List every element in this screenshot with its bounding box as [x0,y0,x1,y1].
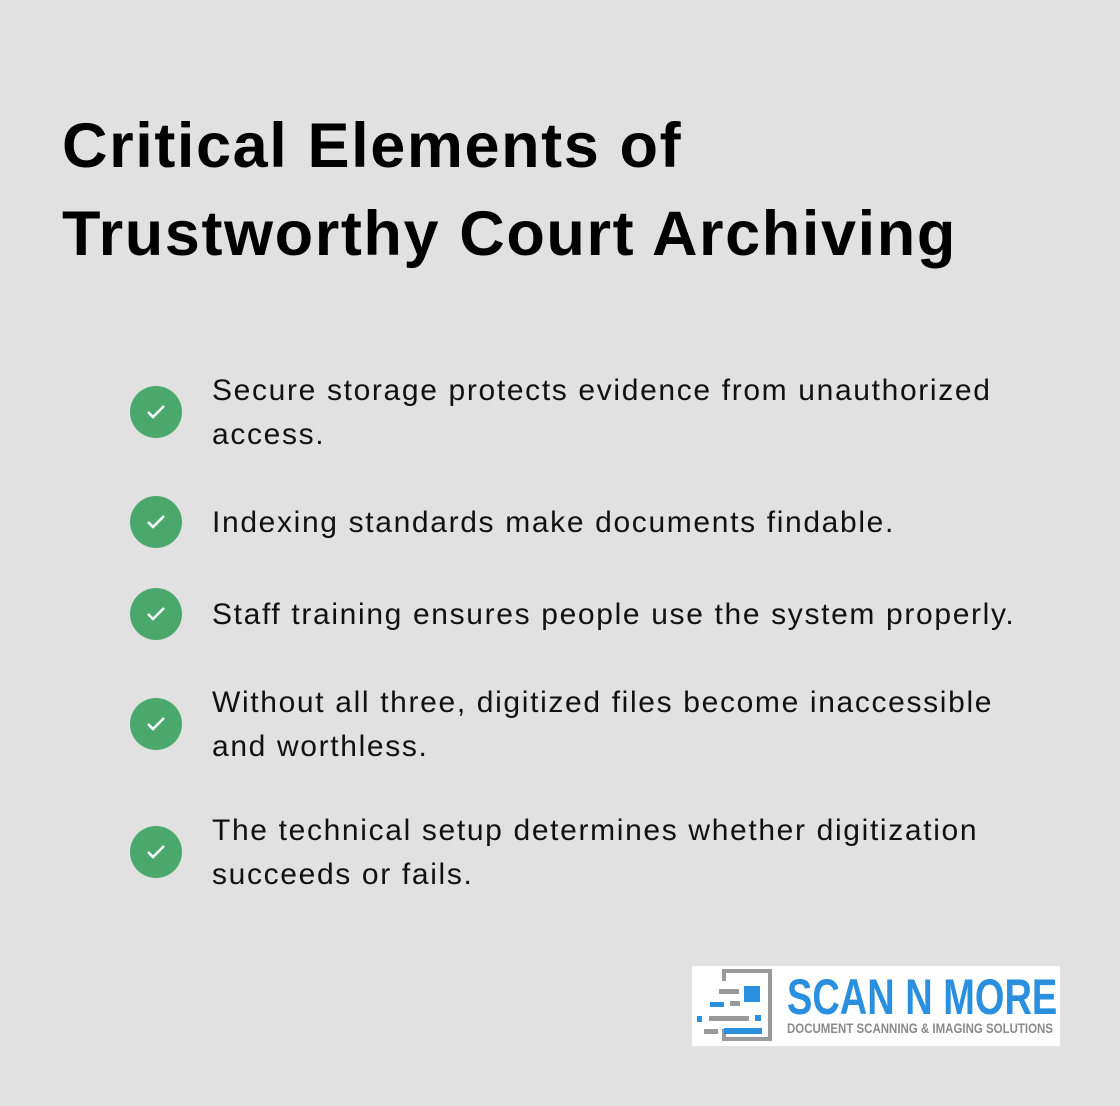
text: succeeds or fails. [212,858,473,891]
text [212,814,978,891]
item 1 [130,374,992,451]
text: Indexing standards make documents findable. [212,506,895,539]
text: The technical setup determines whether digitization [212,814,978,847]
title: Trustworthy Court Archiving [62,199,957,269]
text [212,686,993,763]
logo mark [697,969,772,1041]
text: access. [212,418,325,451]
title [62,111,957,269]
logo text: SCAN N MORE [787,969,1057,1025]
text [212,374,992,451]
item 5 [130,814,978,891]
icon: check [130,386,182,438]
icon: check [130,588,182,640]
icon: check [130,826,182,878]
logo tagline: DOCUMENT SCANNING & IMAGING SOLUTIONS [787,1020,1053,1036]
text: Secure storage protects evidence from unauthorized [212,374,992,407]
icon: check [130,496,182,548]
text: Without all three, digitized files become inaccessible [212,686,993,719]
logo [692,966,1060,1046]
text: Staff training ensures people use the system properly. [212,598,1015,631]
item 2 [130,496,895,548]
text: and worthless. [212,730,429,763]
icon: check [130,698,182,750]
title: Critical Elements of [62,111,682,181]
item 4 [130,686,993,763]
item 3 [130,588,1015,640]
